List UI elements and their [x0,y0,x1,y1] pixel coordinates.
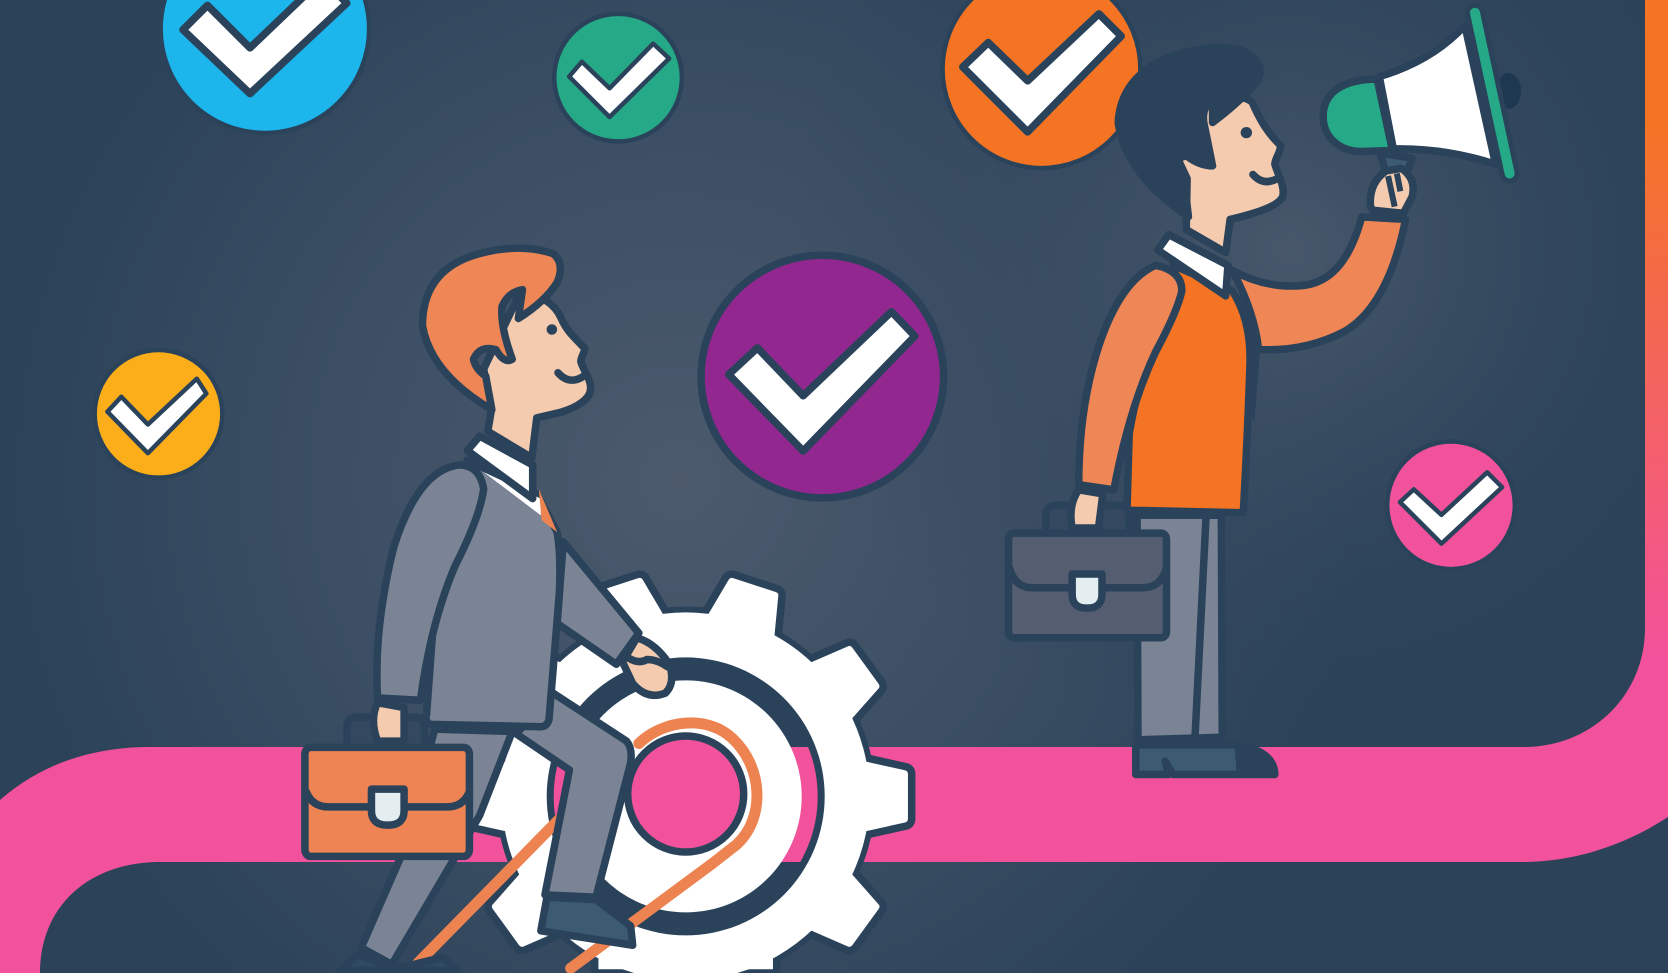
collar [1158,235,1228,296]
icon: purple check badge [701,255,944,498]
front shoe [541,897,633,945]
icon: yellow check badge [95,350,222,478]
smile [558,373,584,380]
collar [467,436,533,499]
briefcase handle [347,717,425,746]
front leg [516,693,631,897]
megaphone [1323,13,1521,176]
eye [1241,127,1252,138]
hand on megaphone [1370,168,1413,213]
neck and face [1177,97,1283,253]
near hand [373,703,404,741]
shirt and tie [484,472,541,515]
icon: green check badge [554,14,682,141]
orange belt loop [413,723,757,968]
icon: pink check badge [1387,441,1515,569]
far arm [557,542,639,664]
icon: blue check badge [161,0,369,133]
near arm [377,465,484,700]
shoes [1136,745,1275,774]
hair [422,248,560,410]
orange sweater [1127,265,1250,513]
near arm [1079,265,1182,490]
figure: businessman walking with orange briefcase [305,248,672,970]
neck and face [484,292,591,458]
back shoe [341,955,457,970]
figure: businessman with megaphone [1009,13,1521,774]
icon: orange check badge [943,0,1140,168]
icon: gear [460,568,912,973]
briefcase handle [1046,505,1129,533]
grey briefcase [1009,533,1166,638]
near hand [1071,490,1103,528]
torso shadow [1239,298,1260,423]
dark hair [1118,48,1260,217]
trousers [1137,515,1222,740]
back leg [361,729,512,964]
smile [1253,174,1278,182]
eye [547,324,557,335]
raised arm [1232,217,1406,350]
orange briefcase [305,747,469,856]
far hand [622,638,672,695]
torso [426,460,560,727]
